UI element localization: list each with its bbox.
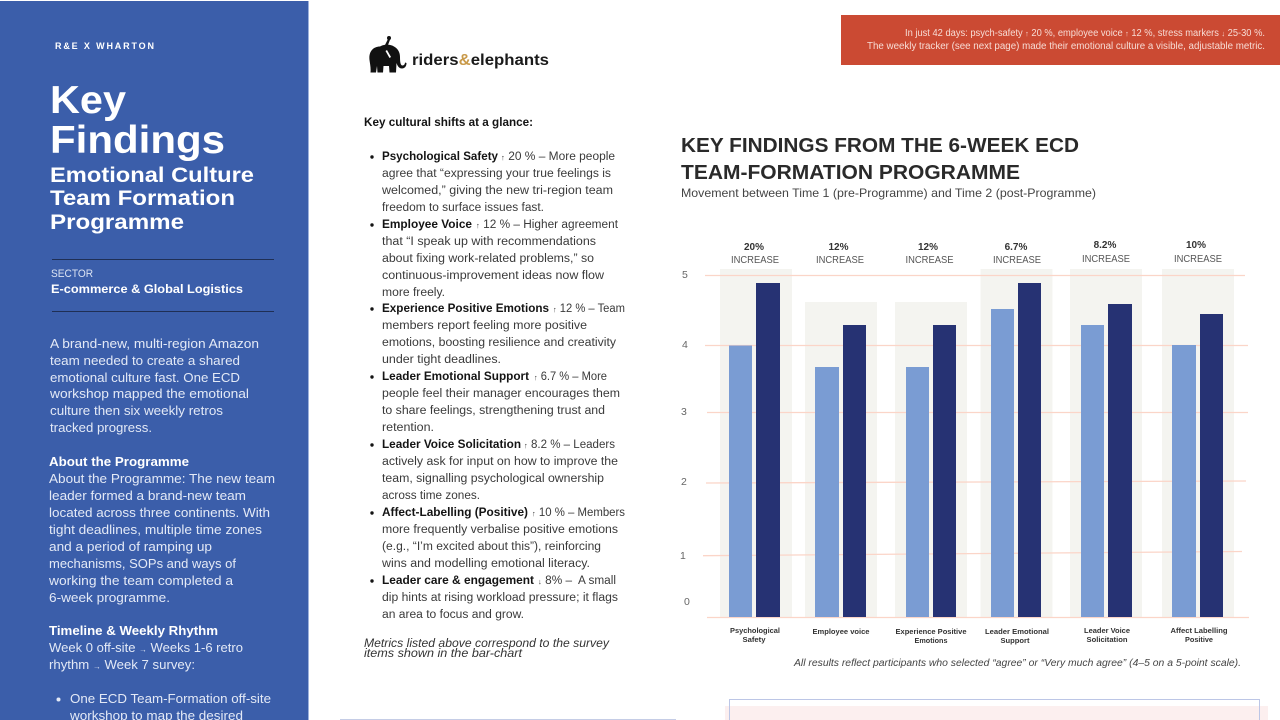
bullet: psychological safety: welcomed,” giving the new tri-region team bbox=[381, 185, 613, 197]
y axis labels: 3 bbox=[681, 406, 687, 418]
chart heading: KEY FINDINGS FROM THE 6-WEEK ECD bbox=[681, 135, 1079, 157]
category labels: Solicitation bbox=[1086, 635, 1128, 644]
y axis labels: 2 bbox=[681, 476, 687, 488]
sector block bbox=[51, 268, 243, 296]
y axis labels: 4 bbox=[682, 339, 688, 351]
y axis labels: 1 bbox=[680, 550, 686, 562]
bullet: leader care and engagement: Leader care & engagement bbox=[382, 575, 534, 587]
bullet: leader emotional support: Leader Emotional Support bbox=[382, 371, 529, 383]
bullet: employee voice: about fixing work-related problems,” so bbox=[382, 253, 594, 265]
sector block: E-commerce & Global Logistics bbox=[51, 282, 243, 296]
bullet: affect labelling: wins and modelling emotional literacy. bbox=[381, 558, 590, 570]
sidebar title bbox=[50, 79, 254, 234]
bullet: psychological safety: ↑ 20 % – More people bbox=[501, 151, 615, 163]
bullet: employee voice: continuous-improvement ideas now flow bbox=[382, 270, 605, 282]
bullet: psychological safety: Psychological Safety bbox=[382, 151, 499, 163]
bullet: employee voice: more freely. bbox=[382, 287, 445, 299]
chart heading: TEAM-FORMATION PROGRAMME bbox=[681, 162, 1020, 184]
about the programme bbox=[48, 455, 275, 605]
timeline and weekly rhythm: One ECD Team-Formation off-site bbox=[70, 692, 271, 706]
bullet: affect labelling: (e.g., “I’m excited about this”), reinforcing bbox=[382, 541, 601, 553]
chart subtitle: Movement between Time 1 (pre-Programme) and Time 2 (post-Programme) bbox=[681, 186, 1096, 200]
intro paragraph bbox=[49, 337, 259, 435]
text block: key cultural shifts heading: Key cultural shifts at a glance: bbox=[364, 115, 533, 129]
intro paragraph: workshop mapped the emotional bbox=[49, 387, 249, 401]
category labels: Psychological bbox=[730, 626, 780, 635]
logo: riders and elephants bbox=[369, 36, 549, 72]
intro paragraph: team needed to create a shared bbox=[50, 354, 240, 368]
sidebar title: Team Formation bbox=[50, 186, 235, 210]
about the programme: mechanisms, SOPs and ways of bbox=[49, 557, 237, 571]
category labels: Affect Labelling bbox=[1170, 626, 1228, 635]
bullet: experience positive emotions: ↑ 12 % – Team bbox=[553, 303, 625, 315]
increase labels: INCREASE bbox=[1082, 254, 1130, 265]
increase labels: 12% bbox=[918, 242, 938, 253]
bullet: leader voice solicitation: team, signalling psychological ownership bbox=[382, 473, 604, 485]
panel: blue sidebar bbox=[0, 1, 309, 720]
category labels: Leader Voice bbox=[1084, 626, 1130, 635]
y axis labels bbox=[680, 269, 690, 608]
sidebar title: Programme bbox=[50, 210, 184, 234]
bullet: employee voice: that “I speak up with recommendations bbox=[382, 236, 596, 248]
bullet: leader voice solicitation: ↑ 8.2 % – Leaders bbox=[524, 439, 615, 451]
category labels: Emotions bbox=[914, 636, 948, 645]
column backgrounds bbox=[720, 269, 1234, 617]
category labels: Leader Emotional bbox=[985, 627, 1049, 636]
time 2 bars bbox=[756, 283, 1223, 617]
increase labels: INCREASE bbox=[731, 255, 779, 266]
increase labels: 20% bbox=[744, 242, 764, 253]
about the programme: leader formed a brand-new team bbox=[49, 489, 246, 503]
bullet: experience positive emotions: members report feeling more positive bbox=[382, 320, 587, 332]
about the programme: About the Programme bbox=[49, 455, 189, 469]
category labels: Safety bbox=[742, 635, 766, 644]
intro paragraph: emotional culture fast. One ECD bbox=[50, 371, 240, 385]
increase labels: 6.7% bbox=[1005, 242, 1028, 253]
bullet: leader emotional support: ↑ 6.7 % – More bbox=[534, 371, 607, 383]
bullet: psychological safety: agree that “expressing your true feelings is bbox=[382, 168, 611, 180]
category labels: Experience Positive bbox=[896, 627, 966, 636]
note: metrics correspond to chart bbox=[364, 638, 610, 660]
increase labels: 12% bbox=[828, 242, 849, 253]
bullet list: cultural shifts bbox=[370, 151, 625, 621]
increase labels: 10% bbox=[1186, 240, 1206, 251]
timeline and weekly rhythm bbox=[49, 624, 271, 720]
logo wordmark: riders&elephants bbox=[412, 52, 549, 69]
bullet: experience positive emotions: under tight deadlines. bbox=[382, 354, 501, 366]
bullet: leader voice solicitation: Leader Voice Solicitation bbox=[382, 439, 521, 451]
increase labels: INCREASE bbox=[1174, 254, 1222, 265]
category labels: Support bbox=[1000, 636, 1030, 645]
note: metrics correspond to chart: items shown in the bar-chart bbox=[364, 648, 523, 660]
about the programme: About the Programme: The new team bbox=[49, 472, 275, 486]
intro paragraph: A brand-new, multi-region Amazon bbox=[50, 337, 259, 351]
time 1 bars bbox=[729, 309, 1196, 617]
note: metrics correspond to chart: Metrics listed above correspond to the survey bbox=[364, 638, 610, 650]
about the programme: working the team completed a bbox=[48, 574, 233, 588]
footnote: All results reflect participants who selected “agree” or “Very much agree” (4–5 on a 5-point scale). bbox=[793, 658, 1241, 669]
bullet: leader care and engagement: an area to focus and grow. bbox=[382, 609, 524, 621]
bullet: leader emotional support: people feel their manager encourages them bbox=[382, 388, 620, 400]
increase labels: INCREASE bbox=[993, 255, 1041, 266]
intro paragraph: culture then six weekly retros bbox=[50, 404, 223, 418]
category labels: Employee voice bbox=[812, 627, 870, 636]
bullet: leader voice solicitation bbox=[370, 439, 618, 502]
callout: red summary banner: In just 42 days: psych-safety ↑ 20 %, employee voice ↑ 12 %, stress markers ↓ 25-30 %. bbox=[905, 28, 1265, 39]
eyebrow label: R&E X WHARTON bbox=[55, 41, 154, 51]
icon: elephant with rider bbox=[369, 36, 406, 72]
bullet: employee voice: Employee Voice bbox=[382, 219, 472, 231]
intro paragraph: tracked progress. bbox=[50, 421, 152, 435]
bullet: affect labelling bbox=[370, 507, 625, 570]
bullet: affect labelling: ↑ 10 % – Members bbox=[532, 507, 625, 519]
bullet: leader emotional support bbox=[370, 371, 620, 434]
bullet: leader emotional support: to share feelings, strengthening trust and bbox=[382, 405, 605, 417]
bullet: leader care and engagement: dip hints at rising workload pressure; it flags bbox=[382, 592, 618, 604]
bullet: leader care and engagement: ↓ 8% – A small bbox=[538, 575, 616, 587]
y axis labels: 0 bbox=[684, 596, 690, 608]
bullet: affect labelling: Affect-Labelling (Positive) bbox=[382, 507, 528, 519]
increase labels: INCREASE bbox=[816, 255, 864, 266]
sidebar title: Key bbox=[50, 79, 126, 122]
timeline and weekly rhythm: Week 0 off-site → Weeks 1-6 retro bbox=[49, 641, 243, 655]
sector block: SECTOR bbox=[51, 268, 93, 280]
category labels: Positive bbox=[1185, 635, 1213, 644]
chart heading bbox=[681, 135, 1096, 200]
timeline and weekly rhythm: rhythm → Week 7 survey: bbox=[49, 658, 195, 672]
bullet: leader emotional support: retention. bbox=[382, 422, 434, 434]
increase labels: 8.2% bbox=[1094, 240, 1117, 251]
sidebar title: Emotional Culture bbox=[50, 163, 254, 187]
about the programme: 6-week programme. bbox=[49, 591, 170, 605]
bar chart bbox=[680, 240, 1249, 645]
about the programme: tight deadlines, multiple time zones bbox=[49, 523, 262, 537]
bullet: employee voice bbox=[370, 219, 619, 299]
bullet: leader voice solicitation: across time zones. bbox=[382, 490, 480, 502]
sidebar title: Findings bbox=[50, 119, 225, 162]
bullet: psychological safety bbox=[370, 151, 615, 214]
panel: next section box bbox=[725, 700, 1268, 720]
y axis labels: 5 bbox=[682, 269, 688, 281]
bullet: experience positive emotions: Experience Positive Emotions bbox=[382, 303, 549, 315]
increase labels: INCREASE bbox=[906, 255, 954, 266]
callout: red summary banner bbox=[841, 15, 1280, 65]
timeline and weekly rhythm: Timeline & Weekly Rhythm bbox=[49, 624, 218, 638]
bullet: leader care and engagement bbox=[370, 575, 618, 621]
callout: red summary banner: The weekly tracker (see next page) made their emotional culture a visible, adjustable metric. bbox=[867, 41, 1265, 52]
about the programme: and a period of ramping up bbox=[49, 540, 212, 554]
bullet: experience positive emotions: emotions, boosting resilience and creativity bbox=[382, 337, 616, 349]
bullet: experience positive emotions bbox=[370, 303, 625, 366]
bullet: psychological safety: freedom to surface issues fast. bbox=[382, 202, 544, 214]
bullet: employee voice: ↑ 12 % – Higher agreement bbox=[476, 219, 619, 231]
bullet: affect labelling: more frequently verbalise positive emotions bbox=[382, 524, 618, 536]
about the programme: located across three continents. With bbox=[49, 506, 270, 520]
category labels bbox=[730, 626, 1228, 645]
bullet: leader voice solicitation: actively ask for input on how to improve the bbox=[382, 456, 618, 468]
increase labels bbox=[731, 240, 1222, 266]
